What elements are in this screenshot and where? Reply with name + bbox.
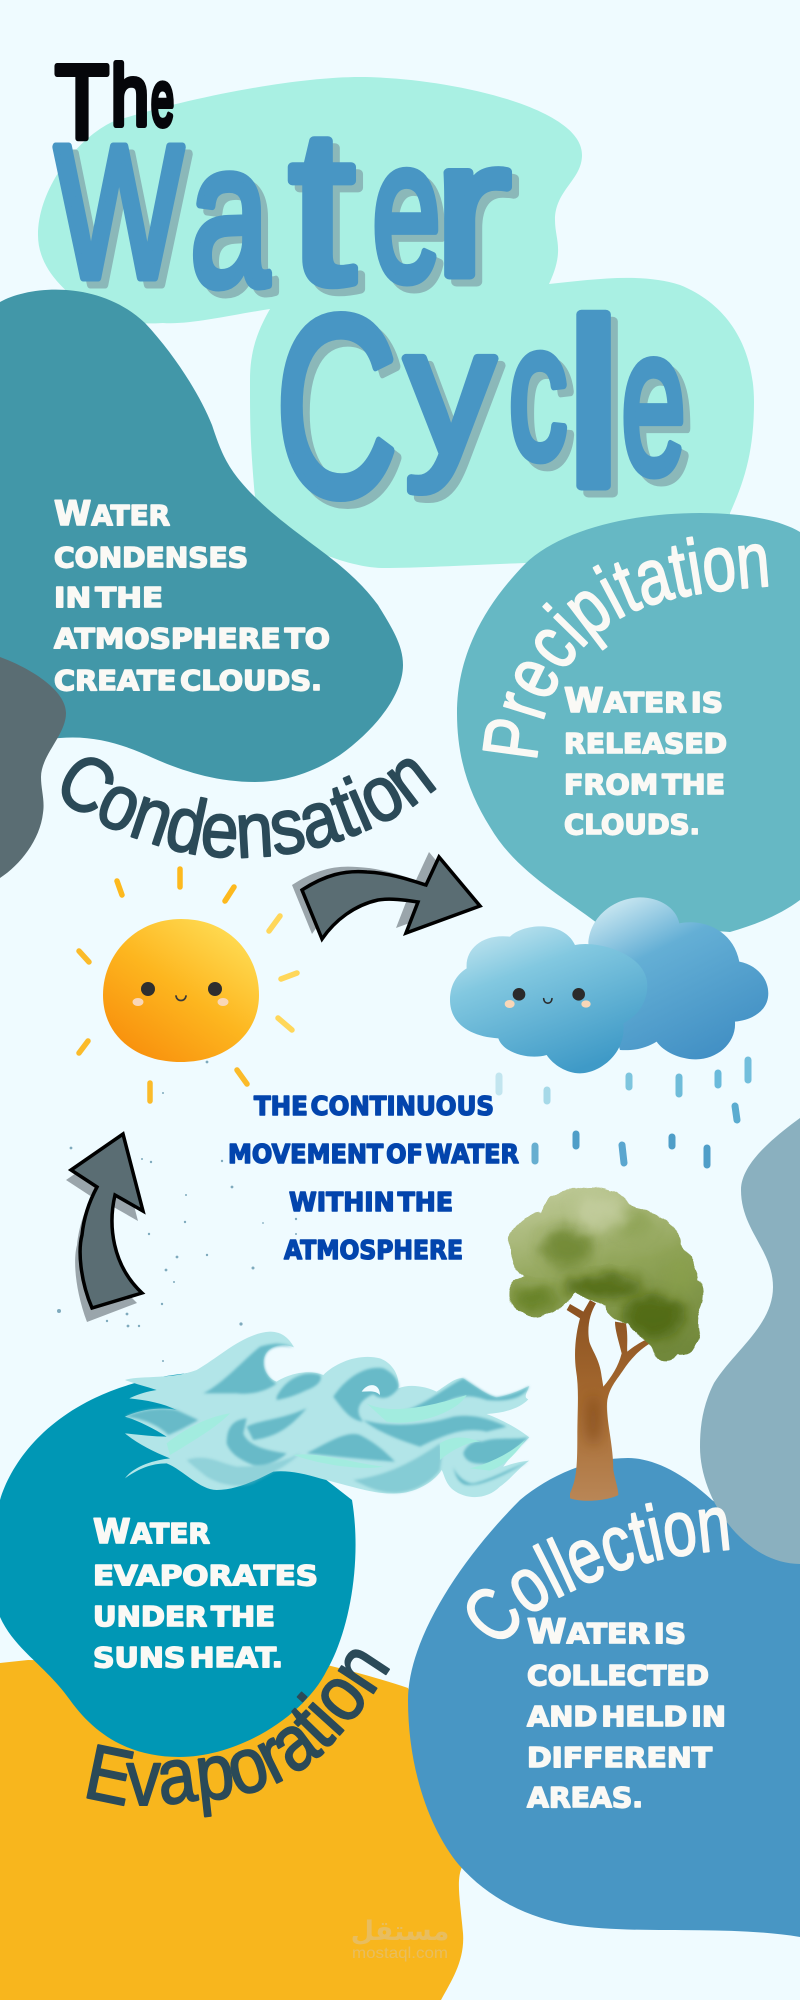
heading: Collection: Collection	[466, 1502, 730, 1640]
text: evaporation description: SUNS HEAT.	[93, 1641, 283, 1674]
text: evaporation description: WATER	[93, 1512, 210, 1552]
text: collection description: WATER IS	[527, 1612, 686, 1652]
heading: Cycle: e	[621, 285, 686, 518]
heading: Cycle: y	[406, 291, 495, 493]
heading: Water	[55, 84, 510, 330]
icon: smiling rain cloud	[450, 897, 768, 1165]
sun rays	[79, 869, 297, 1101]
text: condensation description: WATER	[54, 494, 170, 534]
sun body	[103, 919, 259, 1062]
text: collection description: DIFFERENT	[527, 1741, 712, 1774]
heading: The: T	[55, 44, 109, 161]
heading: Cycle: l	[563, 272, 624, 537]
text: condensation description: ATMOSPHERE TO	[54, 622, 330, 655]
text: condensation description	[54, 494, 330, 697]
speckle dots	[57, 1061, 297, 1362]
heading: Water: a	[190, 100, 270, 329]
heading: Cycle: c	[508, 283, 568, 499]
watermark: mostaql: مستقل	[351, 1916, 449, 1947]
text: collection description	[527, 1612, 726, 1814]
text: condensation description: CONDENSES	[54, 541, 248, 574]
arrow: sun to cloud	[292, 852, 480, 939]
text: central definition: MOVEMENT OF WATER	[228, 1140, 519, 1170]
arrow: evaporation up to sun	[66, 1134, 143, 1322]
watermark: mostaql	[351, 1916, 449, 1962]
blob: precipitation panel	[457, 513, 800, 932]
text: collection description: AREAS.	[527, 1781, 643, 1814]
wave darker shading	[125, 1344, 529, 1493]
blob: collection panel	[408, 1458, 800, 1937]
text: central definition	[228, 1092, 519, 1266]
heading: Precipitation: Precipitation	[482, 536, 768, 758]
heading: Cycle: C	[275, 263, 398, 550]
heading: Cycle	[275, 263, 686, 550]
text: central definition: ATMOSPHERE	[284, 1236, 463, 1266]
heading: The: h	[111, 49, 149, 144]
text: evaporation description: EVAPORATES	[93, 1559, 318, 1592]
text: precipitation description: FROM THE	[564, 768, 725, 801]
text: evaporation description	[93, 1512, 318, 1674]
raindrops	[499, 1060, 748, 1165]
text: collection description: COLLECTED	[527, 1659, 709, 1692]
text: precipitation description: RELEASED	[564, 727, 727, 760]
wave mint highlights	[167, 1395, 525, 1471]
heading: The: e	[151, 54, 174, 142]
blob: blue-grey right accent	[700, 1118, 800, 1564]
tree trunk	[567, 1300, 653, 1501]
blob: mint title backdrop	[38, 77, 754, 568]
icon: watercolour waves	[125, 1332, 529, 1497]
heading: Evaporation: Evaporation	[86, 1649, 390, 1818]
heading: Water: e	[372, 97, 441, 323]
text: precipitation description	[564, 681, 727, 841]
icon: sun	[79, 869, 297, 1101]
heading: Water: r	[434, 100, 510, 317]
text: central definition: WITHIN THE	[289, 1188, 453, 1218]
swirl opening	[362, 1385, 380, 1395]
heading: Condensation: Condensation	[62, 757, 436, 858]
tree foliage	[503, 1183, 710, 1363]
cloud shapes	[450, 897, 768, 1073]
text: evaporation description: UNDER THE	[93, 1600, 275, 1633]
heading: Water: W	[55, 107, 183, 318]
text: central definition: THE CONTINUOUS	[254, 1092, 494, 1122]
watermark: mostaql: mostaql.com	[352, 1945, 448, 1962]
icon: watercolour tree	[503, 1183, 710, 1501]
blob: grey left accent	[0, 657, 66, 878]
text: condensation description: CREATE CLOUDS.	[54, 664, 322, 697]
heading: Water: t	[289, 84, 355, 330]
text: precipitation description: WATER IS	[564, 681, 723, 721]
text: condensation description: IN THE	[54, 581, 163, 614]
text: precipitation description: CLOUDS.	[564, 808, 700, 841]
text: collection description: AND HELD IN	[527, 1700, 726, 1733]
blob: evaporation panel	[0, 1373, 356, 1757]
wave base	[125, 1332, 529, 1497]
sun face	[132, 982, 228, 1006]
blob: condensation panel	[0, 290, 403, 782]
blob: yellow evaporation backdrop	[0, 1660, 463, 2000]
